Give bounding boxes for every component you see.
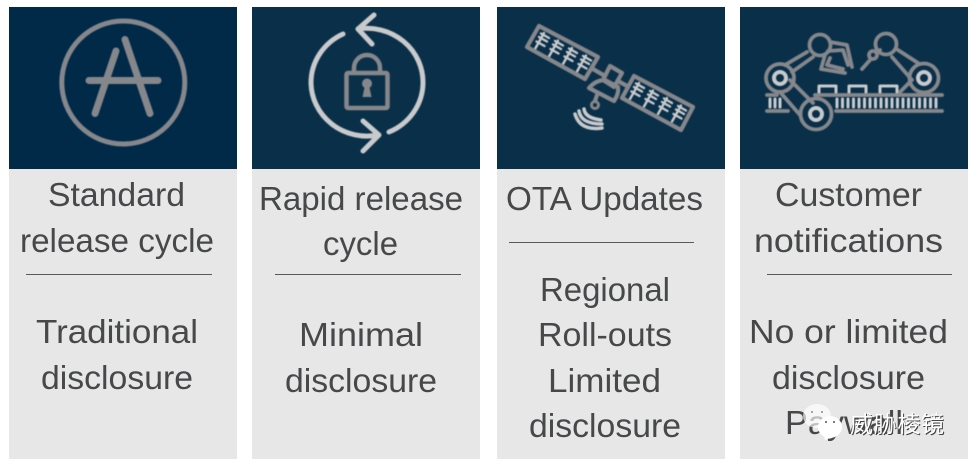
- text: no or limited disclosure, paywall: No or limited: [749, 314, 948, 351]
- panel: customer notifications: [740, 7, 968, 459]
- text: regional roll-outs, limited disclosure: [529, 272, 681, 445]
- icon: lock with circular arrows: [311, 15, 423, 151]
- icon: chat bubbles: [803, 404, 842, 440]
- text: minimal disclosure: Minimal: [299, 317, 423, 354]
- heading: customer notifications: [754, 177, 943, 260]
- text: traditional disclosure: [36, 314, 198, 397]
- text: minimal disclosure: disclosure: [285, 363, 437, 400]
- heading: OTA updates: OTA Updates: [506, 181, 703, 218]
- text: no or limited disclosure, paywall: disclosure: [772, 360, 925, 397]
- text: no or limited disclosure, paywall: [749, 314, 948, 442]
- heading: rapid release cycle: Rapid release: [259, 181, 463, 218]
- panel: rapid release cycle: [252, 7, 480, 459]
- heading: customer notifications: notifications: [754, 223, 943, 260]
- text: traditional disclosure: Traditional: [36, 314, 198, 351]
- text: regional roll-outs, limited disclosure: Regional: [540, 272, 670, 309]
- text: regional roll-outs, limited disclosure: disclosure: [529, 408, 681, 445]
- text: regional roll-outs, limited disclosure: Roll-outs: [538, 317, 672, 354]
- panel: standard release cycle: [9, 7, 237, 459]
- heading: rapid release cycle: cycle: [323, 226, 398, 263]
- text: minimal disclosure: [285, 317, 437, 400]
- text: traditional disclosure: disclosure: [41, 360, 193, 397]
- text: no or limited disclosure, paywall: Paywall: [785, 405, 903, 442]
- text: regional roll-outs, limited disclosure: Limited: [548, 363, 661, 400]
- watermark text: 威胁棱镜: [851, 412, 945, 438]
- heading: standard release cycle: Standard: [48, 177, 185, 214]
- watermark text: 威胁棱镜: [850, 411, 944, 437]
- heading: standard release cycle: [20, 177, 214, 260]
- panel: OTA updates: [497, 7, 725, 459]
- heading: customer notifications: Customer: [775, 177, 922, 214]
- icon: robot arms over conveyor: [766, 34, 942, 130]
- heading: rapid release cycle: [259, 181, 463, 263]
- icon: circled letter A: [62, 21, 185, 144]
- watermark: chat icon and name: [803, 404, 945, 440]
- icon: satellite: [527, 26, 693, 130]
- heading: standard release cycle: release cycle: [20, 223, 214, 260]
